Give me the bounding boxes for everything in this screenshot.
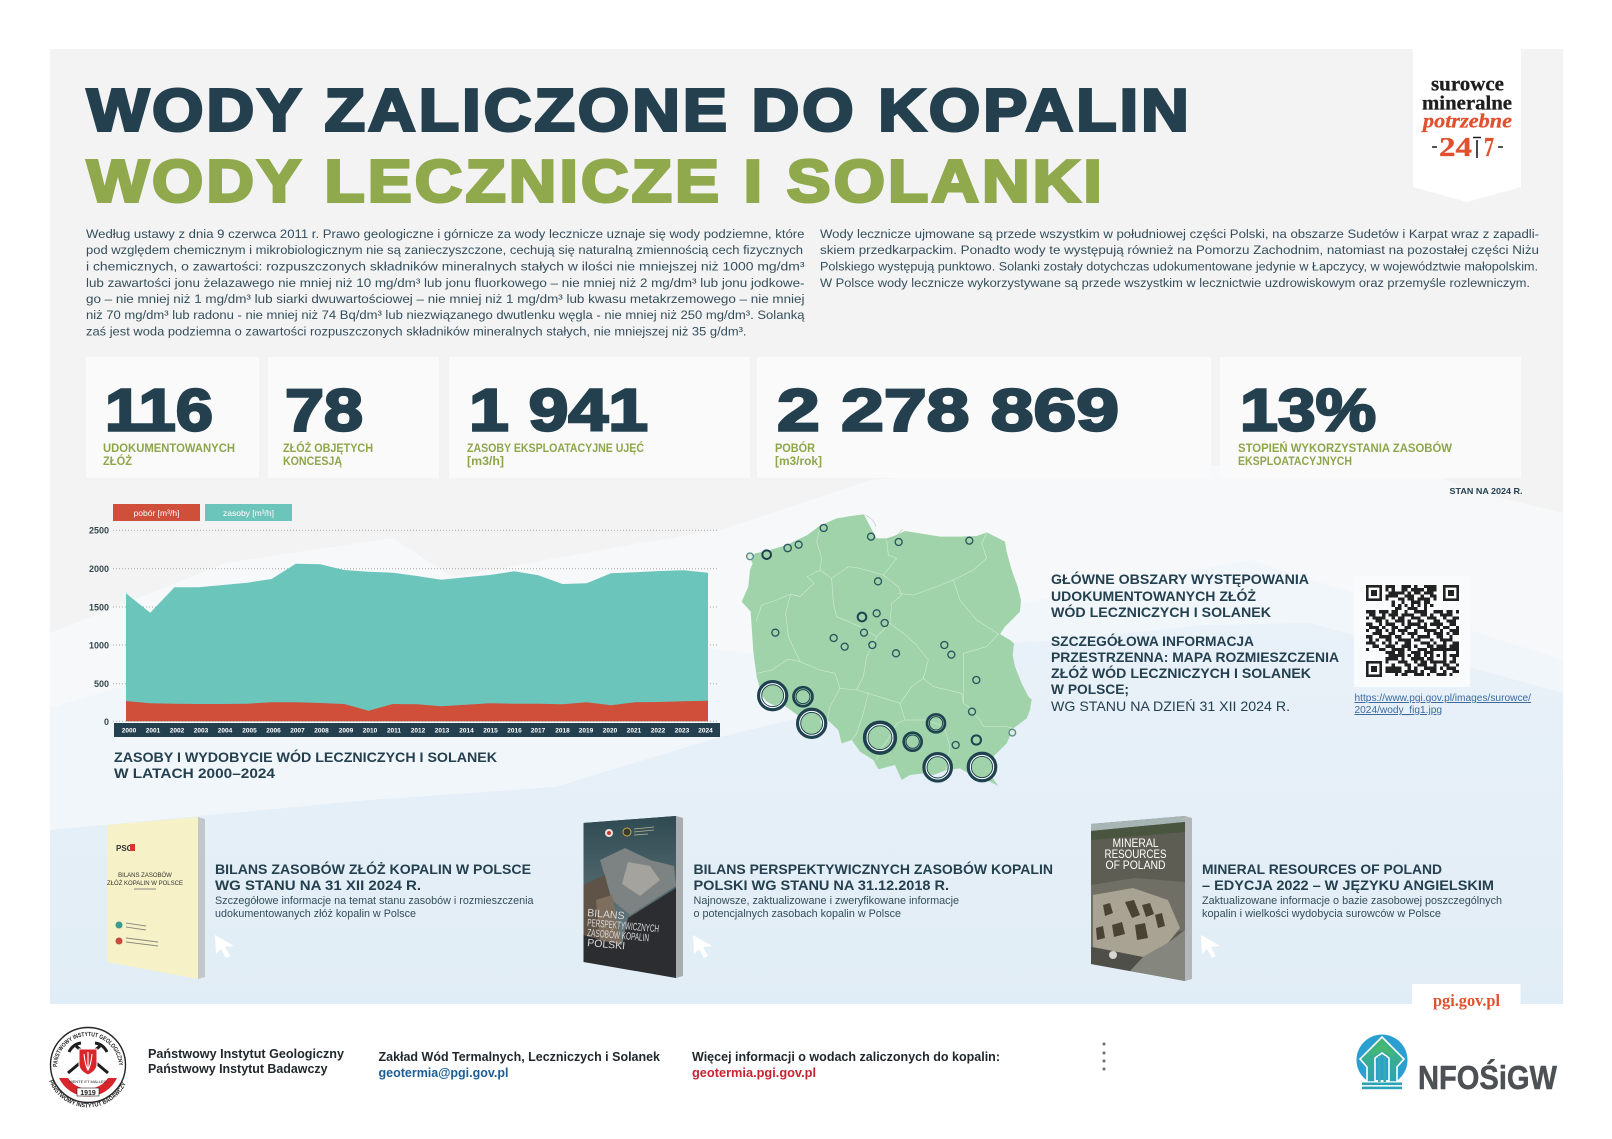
book 3 text: Zaktualizowane informacje o bazie zasobowej poszczególnych [1202,895,1502,907]
x axis years: 2011 [387,728,401,734]
map detail note: WG STANU NA DZIEŃ 31 XII 2024 R. [1051,698,1290,714]
stat card: 78 [268,357,439,478]
x axis years: 2017 [531,728,546,734]
series: pobor [126,701,708,721]
stat card: 116: 116 [105,378,213,444]
x axis years: 2019 [579,728,594,734]
book 1 text: WG STANU NA 31 XII 2024 R. [215,877,421,893]
stat card: 1 941 [449,357,750,478]
footer dots [1102,1042,1106,1070]
small deposit markers [747,524,1016,748]
x axis years: 2014 [459,728,474,734]
QR link [1354,693,1531,716]
text block: definition: niż 70 mg/dm³ lub radonu - nie mniej niż 74 Bq/dm³ lub niezwiązanego dwutlenku węgla - nie mniej niż 250 mg/dm³. Solanką [86,308,805,322]
map detail note: ZŁÓŻ WÓD LECZNICZYCH I SOLANEK [1051,664,1311,681]
legend: zasoby [m³/h] [223,508,274,518]
text block: definition: Według ustawy z dnia 9 czerwca 2011 r. Prawo geologiczne i górnicze za wody lecznicze uznaje się wody podziemne, które [86,227,805,241]
book 1 text [215,860,534,920]
book cover 2: BILANS [587,907,625,922]
stat card: 78: ZŁÓŻ OBJĘTYCH [283,442,373,455]
stat card: 2 278 869: POBÓR [775,442,816,455]
x axis years: 2012 [411,728,426,734]
y axis labels: 2000 [89,564,109,574]
stat card: 116: ZŁÓŻ [103,455,132,468]
logo: NFOSiGW [1355,1034,1557,1097]
logo: PGI emblem: PAŃSTWOWY INSTYTUT GEOLOGICZNY [52,1032,124,1067]
book cover 1: BILANS ZASOBÓW [118,872,172,879]
map heading: UDOKUMENTOWANYCH ZŁÓŻ [1051,587,1256,604]
large deposit markers [759,682,996,781]
map detail note: W POLSCE; [1051,681,1129,697]
stat card: 1 941: 1 941 [469,378,648,444]
website tag: pgi.gov.pl [1433,991,1500,1010]
text block: definition: pod względem chemicznym i mikrobiologicznym nie są zanieczyszczone, cechują się naturalną zmiennością cech fizycznych [86,243,803,257]
stat card: 1 941: [m3/h] [467,456,504,468]
book 2 text: o potencjalnych zasobach kopalin w Polsce [694,908,901,920]
footer: more information: geotermia.pgi.gov.pl [692,1066,816,1080]
footer: institute: Państwowy Instytut Geologiczny [148,1047,344,1061]
x axis years: 2013 [435,728,450,734]
icon: cursor 1 [215,935,234,958]
footer: department [378,1050,660,1080]
y axis labels: 1500 [89,602,109,612]
x axis years: 2022 [651,728,666,734]
stat card: 78: KONCESJĄ [283,456,342,468]
footer: institute: Państwowy Instytut Badawczy [148,1062,328,1076]
book cover 3 [1091,816,1192,981]
footer: more information [692,1050,1000,1080]
book cover 3: RESOURCES [1104,847,1166,861]
x axis years: 2003 [194,728,209,734]
chart title: W LATACH 2000–2024 [114,765,275,781]
logo tag: surowce mineralne potrzebne 24/7: 24 [1439,132,1472,162]
map detail note: SZCZEGÓŁOWA INFORMACJA [1051,632,1254,649]
footer: department: Zakład Wód Termalnych, Leczniczych i Solanek [378,1050,660,1064]
legend [113,504,292,521]
map heading: WÓD LECZNICZYCH I SOLANEK [1051,603,1271,620]
x axis years: 2020 [603,728,618,734]
text block: occurrence: W Polsce wody lecznicze wykorzystywane są przede wszystkim w lecznictwie uzdrowiskowym oraz przemyśle rozlewniczym. [820,276,1530,290]
book cover 1: ZŁÓŻ KOPALIN W POLSCE [107,880,183,887]
footer: institute [148,1047,344,1076]
x axis years: 2010 [363,728,378,734]
stat card: 116: UDOKUMENTOWANYCH [103,443,235,455]
title [87,78,1192,214]
map detail note: PRZESTRZENNA: MAPA ROZMIESZCZENIA [1051,649,1339,665]
book 1 text: udokumentowanych złóż kopalin w Polsce [215,908,416,920]
book cover 2 [584,816,683,978]
book cover 2: ZASOBÓW KOPALIN [587,926,650,944]
y axis labels: 500 [94,679,109,689]
series: zasoby [126,564,708,721]
y axis labels: 2500 [89,526,109,536]
logo tag: surowce mineralne potrzebne 24/7: 7 [1484,132,1494,162]
logo: PGI emblem: PAŃSTWOWY INSTYTUT BADAWCZY [49,1080,126,1108]
footer: department: geotermia@pgi.gov.pl [378,1066,508,1080]
book 3 text: kopalin i wielkości wydobycia surowców w Polsce [1202,908,1441,920]
book cover 3: MINERAL [1112,836,1159,850]
QR link: https://www.pgi.gov.pl/images/surowce/ [1354,693,1531,704]
map of Poland with deposit markers [742,514,1032,786]
website tag [1412,984,1520,1010]
area chart: resources and extraction 2000-2024 [89,504,720,737]
book 3 text: – EDYCJA 2022 – W JĘZYKU ANGIELSKIM [1202,877,1494,893]
book 2 text [694,860,1053,920]
book cover 1: PSG [116,844,133,853]
icon: cursor 3 [1201,935,1220,958]
book 3 text [1202,861,1502,920]
stat card: 116 [86,357,259,478]
QR link: 2024/wody_fig1.jpg [1354,705,1442,716]
map heading [1051,570,1309,620]
QR code [1354,576,1470,687]
text block: occurrence [820,227,1539,290]
y axis labels: 1000 [89,640,109,650]
map heading: GŁÓWNE OBSZARY WYSTĘPOWANIA [1051,570,1309,587]
x axis years: 2018 [555,728,570,734]
book cover 3: OF POLAND [1106,858,1166,872]
logo tag: surowce mineralne potrzebne 24/7: surowce [1431,74,1504,96]
x axis years: 2002 [170,728,185,734]
stat card: 2 278 869 [757,357,1211,478]
logo tag: surowce mineralne potrzebne 24/7: potrzebne [1421,110,1512,132]
x axis years: 2001 [146,728,161,734]
logo tag: surowce mineralne potrzebne 24/7: mineralne [1422,92,1512,114]
x axis years: 2004 [218,728,233,734]
chart title: ZASOBY I WYDOBYCIE WÓD LECZNICZYCH I SOLANEK [114,748,497,765]
panel: mountain background [50,49,1563,1004]
logo: PGI emblem: 1919 [80,1090,96,1097]
logo: PGI emblem [49,1026,126,1108]
text block: definition [86,227,805,338]
chart title [114,748,497,781]
x axis years: 2006 [266,728,281,734]
y axis labels [89,526,109,727]
text block: definition: lub zawartości jonu żelazawego nie mniej niż 10 mg/dm³ lub jonu fluorkowego – nie mniej niż 2 mg/dm³ lub jonu jodkowe- [86,276,804,290]
book cover 1 [107,817,205,979]
stat card: 13%: STOPIEŃ WYKORZYSTANIA ZASOBÓW [1238,442,1452,455]
x axis years: 2000 [122,728,137,734]
x axis years: 2023 [675,728,690,734]
book cover 2: POLSKI [587,937,626,952]
text block: occurrence: skiem przedkarpackim. Ponadto wody te występują również na Pomorzu Zachodnim, natomiast na pozostałej części Niżu [820,243,1539,257]
x axis years [114,723,720,737]
country shape [742,514,1032,786]
x axis years: 2009 [339,728,354,734]
stat card: 1 941: ZASOBY EKSPLOATACYJNE UJĘĆ [467,442,644,455]
book 1 text: BILANS ZASOBÓW ZŁÓŻ KOPALIN W POLSCE [215,860,531,877]
text block: definition: zaś jest woda podziemna o zawartości rozpuszczonych składników mineralnych stałych, nie mniejszej niż 35 g/dm³. [86,324,746,338]
title line 2: WODY LECZNICZE I SOLANKI [87,148,1105,214]
map detail note [1051,632,1339,714]
text block: occurrence: Polskiego występują punktowo. Solanki zostały dotychczas udokumentowane jedynie w Łapczycy, w województwie małopolskim. [820,260,1538,274]
x axis years: 2016 [507,728,522,734]
logo: NFOSiGW: NFOŚiGW [1418,1059,1557,1097]
book 3 text: MINERAL RESOURCES OF POLAND [1202,861,1442,877]
x axis years: 2005 [242,728,257,734]
text block: occurrence: Wody lecznicze ujmowane są przede wszystkim w południowej części Polski, na obszarze Sudetów i Karpat wraz z zapadli- [820,227,1539,241]
x axis years: 2021 [627,728,642,734]
logo: PGI emblem: MENTE ET MALLEO [69,1079,107,1084]
x axis years: 2007 [290,728,305,734]
book 2 text: BILANS PERSPEKTYWICZNYCH ZASOBÓW KOPALIN [694,860,1053,877]
x axis years: 2015 [483,728,498,734]
stat card: 2 278 869: [m3/rok] [775,456,822,468]
date note: STAN NA 2024 R. [1450,486,1522,496]
title line 1: WODY ZALICZONE DO KOPALIN [87,78,1192,144]
stat card: 13% [1220,357,1521,478]
stat card: 78: 78 [285,378,363,444]
stat card: 2 278 869: 2 278 869 [777,378,1119,444]
x axis years: 2024 [698,728,713,734]
book 2 text: POLSKI WG STANU NA 31.12.2018 R. [694,877,949,893]
text block: definition: i chemicznych, o zawartości: rozpuszczonych składników mineralnych stałych w ilości nie mniejszej niż 1000 mg/dm³ [86,260,804,274]
y axis labels: 0 [104,717,109,727]
x axis years: 2008 [314,728,329,734]
book cover 2: PERSPEKTYWICZNYCH [587,917,660,935]
book 1 text: Szczegółowe informacje na temat stanu zasobów i rozmieszczenia [215,895,534,907]
stat card: 13%: 13% [1240,378,1376,444]
icon: cursor 2 [693,935,712,958]
footer: more information: Więcej informacji o wodach zaliczonych do kopalin: [692,1050,1000,1064]
book 2 text: Najnowsze, zaktualizowane i zweryfikowane informacje [694,895,959,907]
stat card: 13%: EKSPLOATACYJNYCH [1238,456,1352,468]
text block: definition: go – nie mniej niż 1 mg/dm³ lub siarki dwuwartościowej – nie mniej niż 1 mg/dm³ lub kwasu metakrzemowego – nie mniej [86,292,805,306]
logo tag: surowce mineralne potrzebne 24/7 [1413,49,1521,202]
legend: pobór [m³/h] [134,508,179,518]
